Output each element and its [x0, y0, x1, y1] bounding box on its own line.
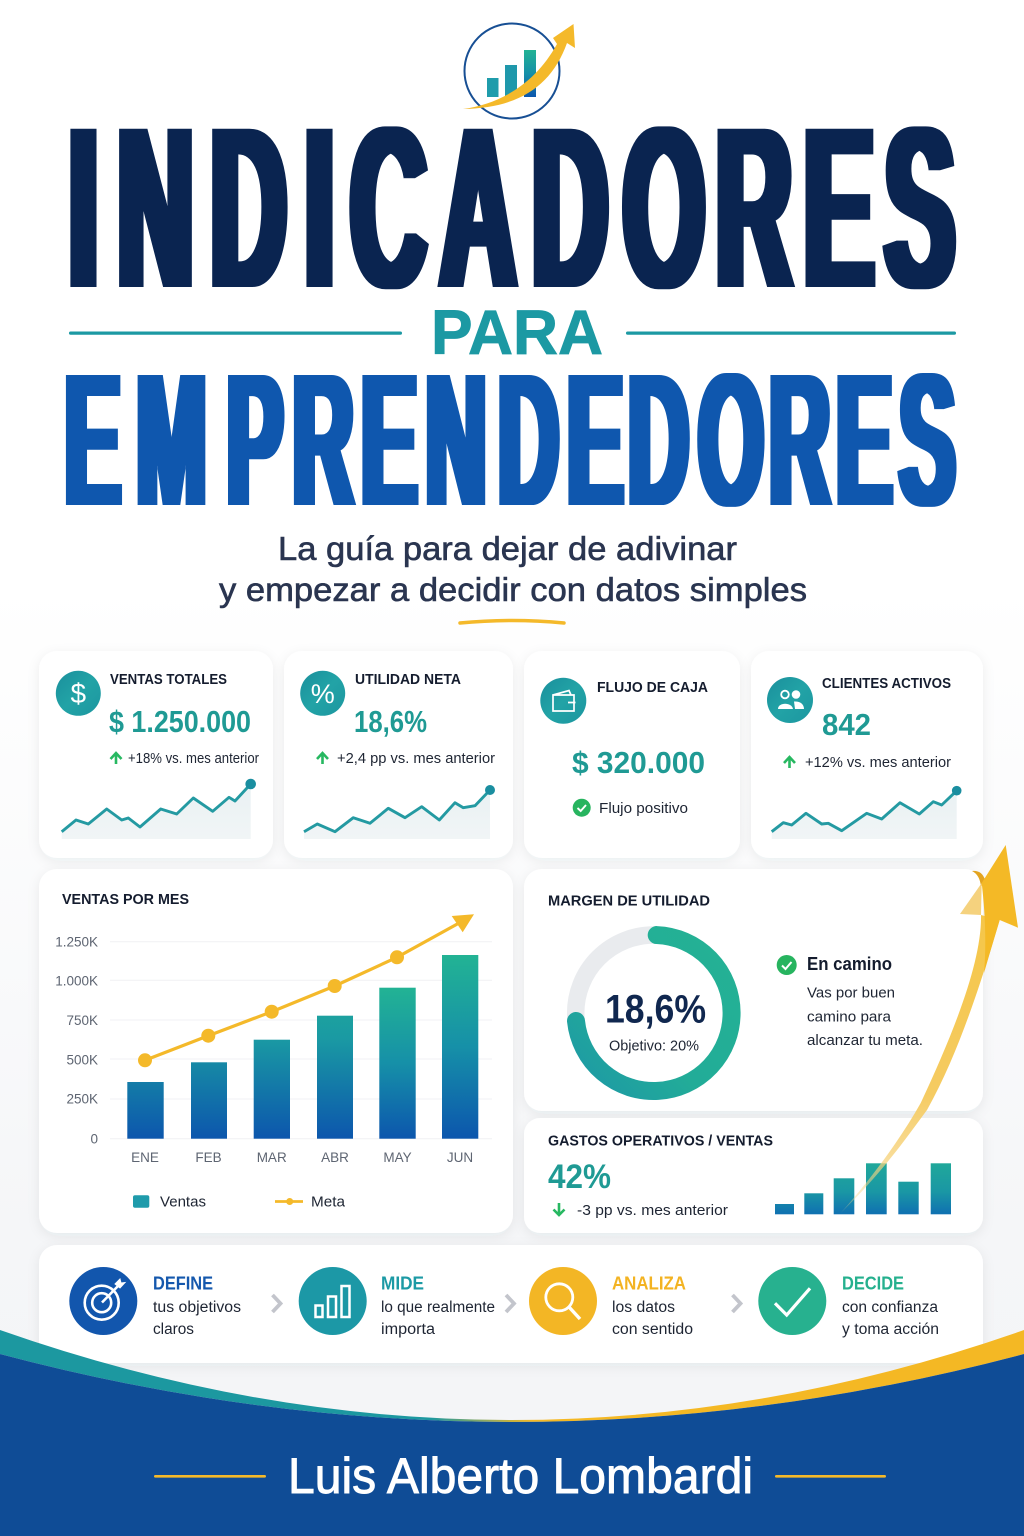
bar chart: 250K: [66, 1092, 98, 1106]
bar chart: 750K: [66, 1013, 98, 1028]
title: EMPRENDEDORES: EMPRENDEDORES: [65, 334, 955, 545]
value: 18,6%: [354, 704, 427, 739]
subtitle: [219, 530, 807, 608]
heading: GASTOS OPERATIVOS / VENTAS: [548, 1133, 773, 1149]
bar chart: 1.250K: [55, 934, 98, 950]
title: INDICADORES: INDICADORES: [69, 79, 955, 336]
value: 42%: [548, 1158, 611, 1196]
step: decide: y toma acción: [842, 1321, 939, 1338]
panel: utilidad neta: [284, 651, 513, 858]
status: en camino: camino para: [807, 1009, 892, 1025]
icon: users: [767, 677, 813, 723]
bar chart: FEB: [195, 1150, 222, 1165]
value: $ 1.250.000: [109, 704, 251, 739]
bar chart: ABR: [321, 1150, 349, 1165]
panel: flujo de caja: [524, 651, 740, 858]
heading: PARA with side rules: PARA: [431, 298, 603, 368]
delta: +18% vs. mes anterior: [128, 751, 259, 767]
label: VENTAS TOTALES: [110, 672, 227, 688]
label: UTILIDAD NETA: [355, 672, 461, 688]
label: CLIENTES ACTIVOS: [822, 676, 951, 692]
heading: VENTAS POR MES: [62, 892, 189, 908]
value: 842: [822, 707, 871, 742]
status: en camino: En camino: [807, 953, 892, 974]
mini bar chart: [775, 1163, 951, 1214]
delta: -3 pp vs. mes anterior: [577, 1203, 728, 1219]
heading: PARA with side rules: [69, 298, 956, 368]
legend: Meta: [311, 1195, 346, 1211]
step: decide: [758, 1267, 939, 1338]
donut chart: 18,6%: [605, 988, 706, 1032]
sparkline: [304, 785, 495, 839]
status: [573, 799, 688, 817]
panel: ventas totales: [39, 651, 273, 858]
icon: wallet: [540, 678, 586, 724]
bar chart: 0: [90, 1132, 98, 1146]
subtitle underline: [460, 620, 564, 623]
donut chart: [576, 935, 732, 1091]
line: meta with arrow: [138, 914, 474, 1067]
value: $ 320.000: [572, 745, 705, 780]
status: Flujo positivo: [599, 801, 688, 817]
arrow: chevron 3: [732, 1295, 740, 1312]
panel: margen de utilidad: [524, 869, 983, 1111]
step: mide: importa: [381, 1321, 435, 1338]
status: en camino: Vas por buen: [807, 986, 895, 1002]
step: analiza: [529, 1267, 693, 1338]
step: analiza: los datos: [612, 1299, 675, 1316]
status: en camino: alcanzar tu meta.: [807, 1033, 923, 1049]
step: analiza: ANALIZA: [612, 1273, 686, 1293]
bar chart: ENE: [131, 1150, 159, 1165]
bar chart: MAY: [383, 1150, 412, 1165]
step: mide: [299, 1267, 495, 1338]
step: mide: MIDE: [381, 1273, 424, 1293]
arrow: chevron 2: [506, 1295, 514, 1312]
legend: [133, 1195, 346, 1211]
delta: +2,4 pp vs. mes anterior: [337, 751, 495, 767]
icon: logo growth chart: [463, 24, 575, 118]
step: decide: con confianza: [842, 1299, 938, 1316]
step: mide: lo que realmente: [381, 1299, 495, 1316]
arrow: chevron 1: [272, 1295, 280, 1312]
subtitle: La guía para dejar de adivinar: [278, 530, 737, 567]
bar chart: 500K: [66, 1052, 98, 1068]
step: define: tus objetivos: [153, 1299, 241, 1316]
step: analiza: con sentido: [612, 1321, 693, 1338]
panel: gastos operativos: [524, 1118, 983, 1233]
bar chart: 1.000K: [55, 974, 98, 988]
step: define: claros: [153, 1321, 194, 1338]
icon: percent: [300, 671, 345, 716]
author name: Luis Alberto Lombardi: [288, 1448, 753, 1504]
icon: dollar: [56, 671, 101, 716]
panel: process steps: [39, 1245, 983, 1363]
arrow: big yellow growth arrow: [841, 845, 1018, 1213]
panel: ventas por mes: [39, 869, 513, 1233]
sparkline: [62, 779, 256, 839]
bottom curved band: [0, 1330, 1024, 1536]
step: define: [69, 1267, 241, 1338]
status: en camino: [777, 953, 923, 1049]
icon: percent: %: [311, 679, 335, 709]
step: define: DEFINE: [153, 1273, 213, 1293]
panel: clientes activos: [751, 651, 983, 858]
label: FLUJO DE CAJA: [597, 680, 708, 696]
heading: MARGEN DE UTILIDAD: [548, 894, 710, 910]
subtitle: y empezar a decidir con datos simples: [219, 571, 807, 608]
icon: dollar: $: [71, 678, 87, 709]
step: decide: DECIDE: [842, 1273, 904, 1293]
delta: +12% vs. mes anterior: [805, 755, 951, 771]
sparkline: [772, 786, 962, 839]
legend: Ventas: [160, 1195, 206, 1211]
donut chart: Objetivo: 20%: [609, 1039, 699, 1055]
bar chart: MAR: [257, 1150, 287, 1165]
bar chart: [55, 934, 492, 1165]
bar chart: JUN: [447, 1150, 473, 1165]
